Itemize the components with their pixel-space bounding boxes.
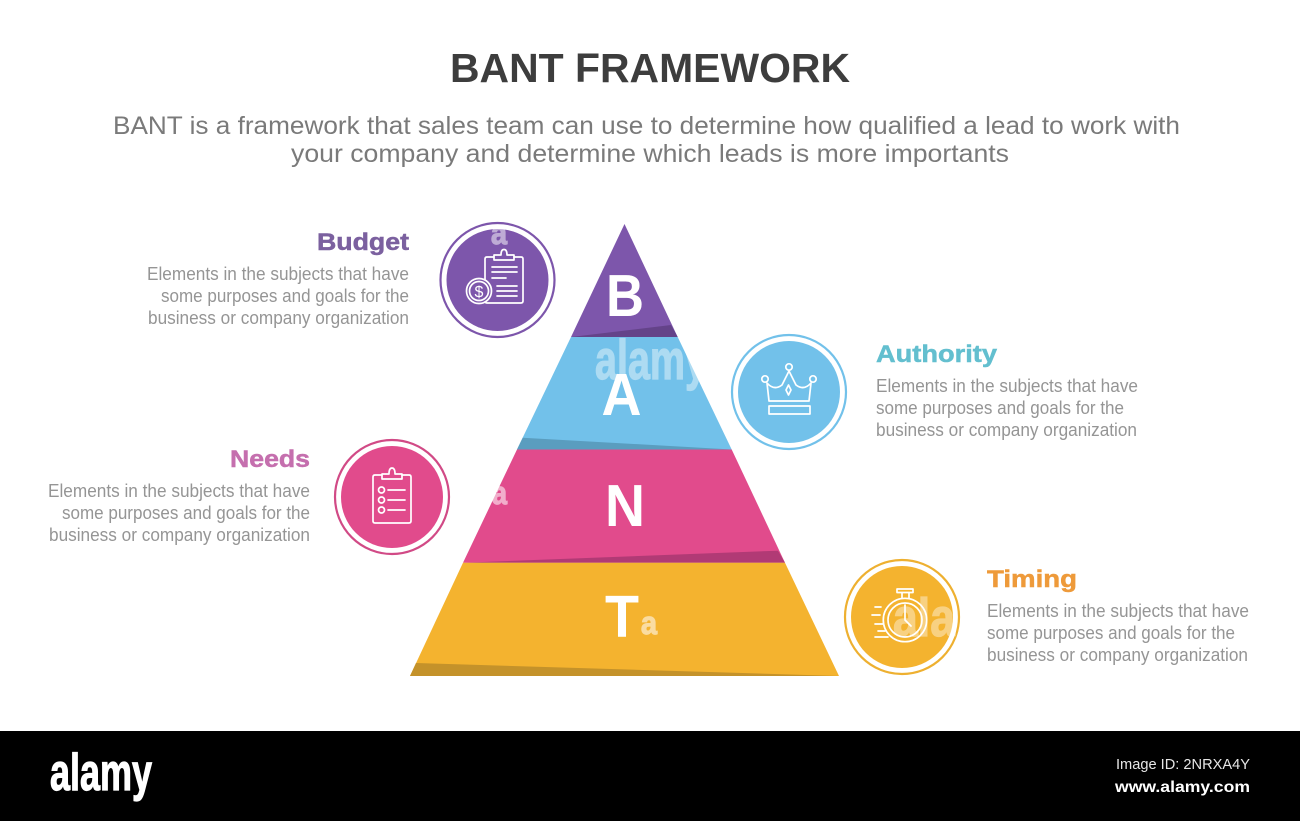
- icon: budget clipboard with dollar coin: a: [491, 215, 507, 251]
- text block: needs: business or company organization: [49, 525, 310, 545]
- text block: authority: business or company organization: [876, 420, 1137, 440]
- text block: timing: [987, 601, 1249, 665]
- text block: needs: some purposes and goals for the: [62, 503, 310, 523]
- heading: timing: Timing: [987, 566, 1077, 593]
- pyramid tier: timing: [410, 563, 839, 676]
- subtitle: [113, 112, 1180, 168]
- text block: budget: [147, 264, 409, 328]
- text block: authority: Elements in the subjects that have: [876, 376, 1138, 396]
- title: BANT FRAMEWORK: [450, 45, 850, 91]
- text block: timing: some purposes and goals for the: [987, 623, 1235, 643]
- icon: budget clipboard with dollar coin: $: [475, 284, 484, 301]
- icon: timing stopwatch: [845, 560, 959, 674]
- text block: authority: some purposes and goals for the: [876, 398, 1124, 418]
- pyramid tier: timing: T: [605, 584, 639, 650]
- panel: timing: [845, 560, 1249, 674]
- pyramid tier: authority: A: [602, 362, 642, 428]
- footer bar: [0, 731, 1300, 821]
- footer logo: alamy: [50, 744, 152, 802]
- icon: needs checklist clipboard: [335, 440, 449, 554]
- text block: budget: some purposes and goals for the: [161, 286, 409, 306]
- panel: budget: [147, 215, 554, 337]
- pyramid tier: budget: B: [606, 263, 644, 329]
- panel: authority: [732, 335, 1138, 449]
- text block: needs: [48, 481, 310, 545]
- text block: authority: [876, 376, 1138, 440]
- panel: needs: [48, 440, 449, 554]
- heading: needs: Needs: [230, 446, 310, 473]
- subtitle: BANT is a framework that sales team can use to determine how qualified a lead to work with: [113, 112, 1180, 140]
- heading: authority: Authority: [876, 341, 998, 368]
- text block: budget: Elements in the subjects that have: [147, 264, 409, 284]
- pyramid: [410, 224, 839, 676]
- icon: authority crown: [732, 335, 846, 449]
- text block: budget: business or company organization: [148, 308, 409, 328]
- pyramid tier: budget: [571, 224, 678, 337]
- heading: budget: Budget: [317, 229, 409, 256]
- pyramid tier: timing: a: [641, 605, 657, 641]
- pyramid tier: needs: [463, 450, 785, 563]
- text block: timing: business or company organization: [987, 645, 1248, 665]
- pyramid tier: needs: N: [605, 473, 645, 539]
- icon: budget clipboard with dollar coin: [440, 215, 554, 337]
- pyramid tier: needs: a: [492, 475, 507, 511]
- image id: Image ID: 2NRXA4Y: [1116, 756, 1250, 773]
- subtitle: your company and determine which leads is more importants: [291, 140, 1009, 168]
- pyramid tier: authority: alamy: [595, 328, 707, 391]
- pyramid tier: authority: [517, 328, 732, 450]
- website: www.alamy.com: [1114, 779, 1250, 796]
- icon: timing stopwatch: ala: [893, 588, 956, 648]
- text block: needs: Elements in the subjects that have: [48, 481, 310, 501]
- text block: timing: Elements in the subjects that have: [987, 601, 1249, 621]
